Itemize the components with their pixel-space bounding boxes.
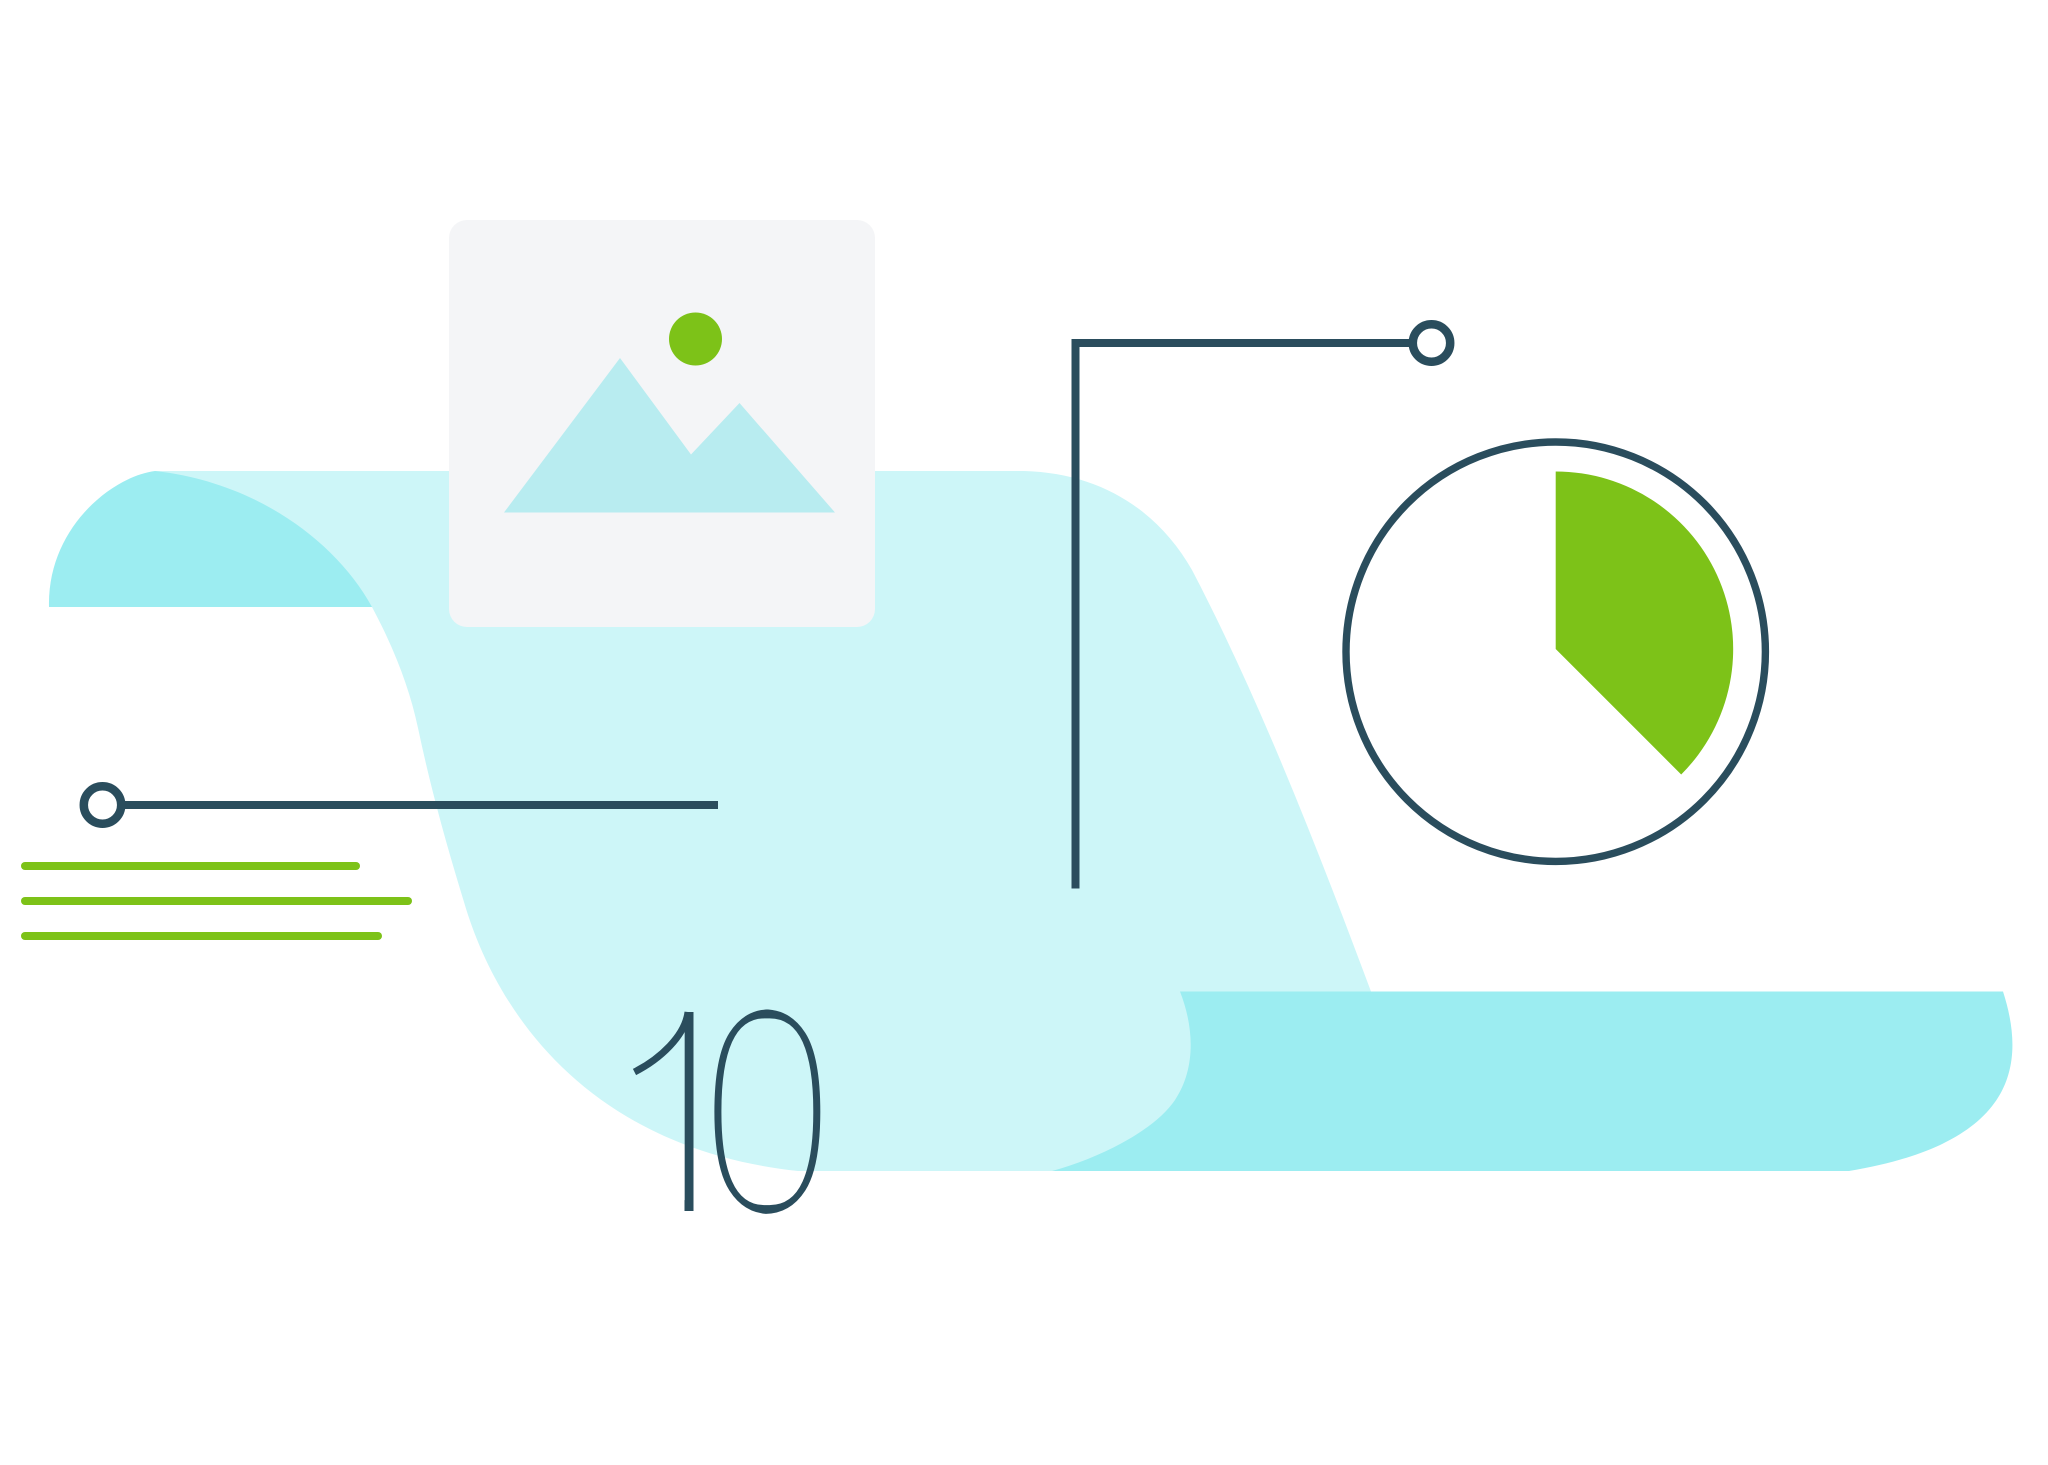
illustration bbox=[21, 220, 2012, 1214]
background shape: top-left fold bbox=[49, 471, 372, 607]
digit 0: 0 bbox=[690, 959, 846, 1276]
connector: right elbow line with node bbox=[1076, 324, 1450, 888]
card background bbox=[449, 220, 875, 627]
pie chart bbox=[1346, 442, 1765, 861]
icon: mountains bbox=[504, 358, 835, 512]
digit 1 stem: 1 bbox=[609, 959, 765, 1276]
icon: sun bbox=[669, 312, 722, 366]
pie slice bbox=[1556, 472, 1733, 774]
background shape: bottom-right fold bbox=[1052, 992, 2012, 1171]
text placeholder lines bbox=[21, 862, 412, 940]
image placeholder card bbox=[449, 220, 875, 627]
pie outline bbox=[1346, 442, 1765, 861]
number 10 bbox=[633, 1009, 820, 1214]
background shape: light aqua ribbon bbox=[155, 471, 1371, 1171]
connector: left horizontal line with node bbox=[84, 786, 718, 824]
digit 1 flag bbox=[634, 1012, 688, 1072]
